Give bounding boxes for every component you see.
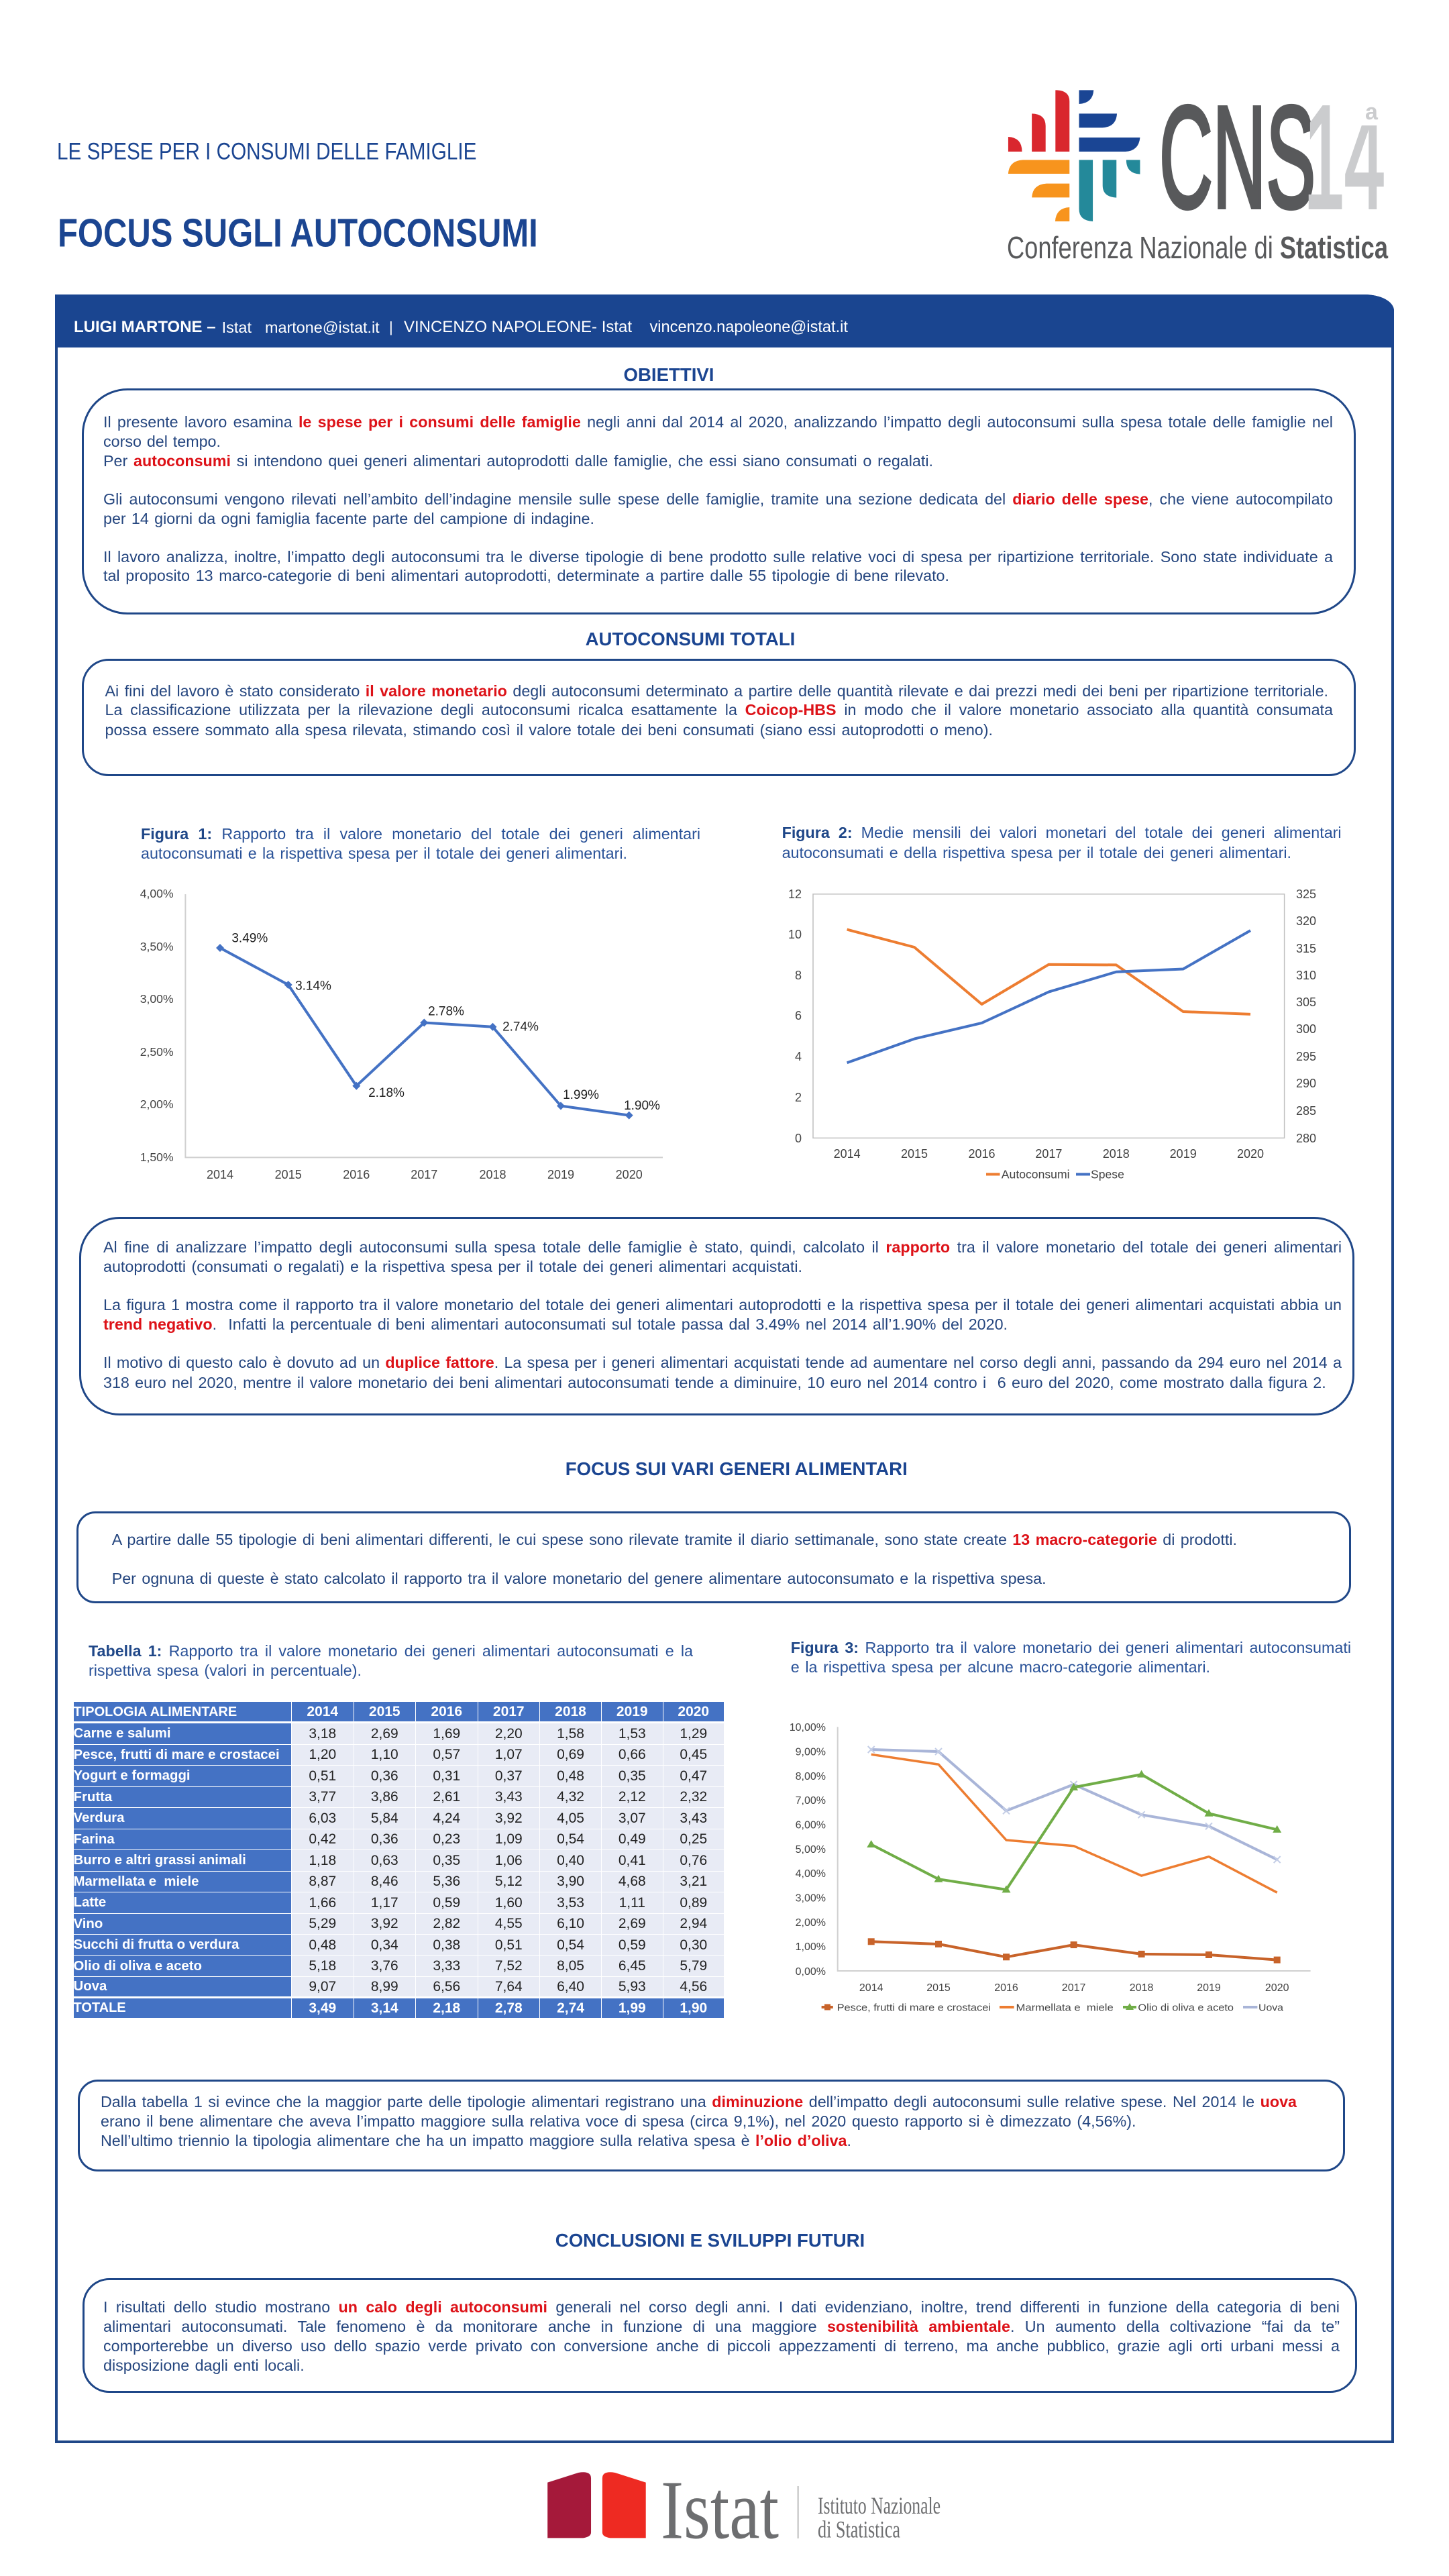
panel: rapporto e trend: trend negativo. Infatti la percentuale di beni alimentari autoconsumati sul totale passa dal 3.49% nel 2014 all’1.90% del 2020. [103,1316,1008,1333]
panel: rapporto e trend: autoprodotti (consumati o regalati) e la rispettiva spesa per il totale dei generi alimentari acquistati. [103,1257,802,1275]
table: tabella 1: 5,79 [680,1958,707,1974]
panel: rapporto e trend: Al fine di analizzare l’impatto degli autoconsumi sulla spesa totale delle famiglie è stato, quindi, calcolato il rapporto tra il valore monetario del totale dei generi alimentari [103,1238,1342,1256]
table: tabella 1: 0,31 [433,1768,460,1784]
caption: tabella 1: rispettiva spesa (valori in percentuale). [89,1662,362,1679]
main frame [55,294,1394,2443]
caption: figura 1 [141,825,700,862]
table: tabella 1: 5,12 [495,1874,523,1889]
table: tabella 1: 0,63 [371,1853,398,1868]
panel: macro-categorie: Per ognuna di queste è stato calcolato il rapporto tra il valore monetario del genere alimentare autoconsumato e la rispettiva spesa. [112,1570,1046,1587]
panel: obiettivi: Gli autoconsumi vengono rilevati nell’ambito dell’indagine mensile sulle spese delle famiglie, tramite una sezione dedicata del diario delle spese, che viene autocompilato [103,490,1333,508]
panel: obiettivi [82,388,1356,614]
table: tabella 1: 0,51 [309,1768,336,1784]
logo: CNS 14a Conferenza Nazionale di Statistica: CNS [1159,76,1316,239]
legend: figura 3: Uova [1258,2002,1284,2014]
chart: figura 1 line chart: 2018 [479,1168,506,1181]
table: tabella 1: 6,03 [309,1811,336,1826]
table: tabella 1: 0,57 [433,1747,460,1762]
panel: commento tabella: erano il bene alimentare che aveva l’impatto maggiore sulla relativa voce di spesa (circa 9,1%), nel 2020 questo rapporto si è dimezzato (4,56%). [101,2112,1136,2130]
table: tabella 1: Yogurt e formaggi [74,1768,191,1783]
logo: CNS 14a Conferenza Nazionale di Statistica: a [1365,99,1379,125]
table: tabella 1: 0,42 [309,1831,336,1847]
caption: figura 3 [791,1639,1351,1676]
table: tabella 1: 0,51 [495,1937,523,1953]
chart: figura 1 line chart: 3,00% [140,992,174,1006]
table: tabella 1: 0,48 [309,1937,336,1953]
table: tabella 1: 0,54 [557,1831,584,1847]
chart: figura 2 dual-axis line chart: 8 [795,969,802,982]
chart: figura 3 line chart: 2020 [1265,1982,1289,1994]
table: tabella 1: 0,66 [619,1747,646,1762]
table: tabella 1: 2,32 [680,1789,707,1805]
table: tabella 1: 0,38 [433,1937,460,1953]
authors bar: VINCENZO NAPOLEONE- Istat [404,318,632,336]
chart: figura 2 dual-axis line chart: 10 [788,928,802,941]
chart: figura 1 line chart: 2,50% [140,1045,174,1059]
panel: rapporto e trend: 318 euro nel 2020, mentre il valore monetario dei beni alimentari autoconsumati tende a diminuire, 10 euro nel 2014 contro i 6 euro del 2020, come mostrato dalla figura 2. [103,1374,1326,1391]
table: tabella 1: 2016 [431,1704,462,1719]
table: tabella 1: 1,99 [619,2000,646,2016]
chart: figura 1 line chart: 2,00% [140,1097,174,1111]
legend: figura 2: Spese [1091,1167,1124,1181]
authors bar: LUIGI MARTONE – [74,318,216,336]
chart: figura 2 dual-axis line chart: 2016 [968,1147,996,1161]
table: tabella 1: 1,18 [309,1853,336,1868]
chart: figura 2 dual-axis line chart: 285 [1296,1104,1316,1118]
chart: figura 2 dual-axis line chart: 4 [795,1050,802,1063]
table: tabella 1: 5,29 [309,1916,336,1931]
chart: figura 2 dual-axis line chart: 2017 [1035,1147,1062,1161]
table: tabella 1: 8,87 [309,1874,336,1889]
table: tabella 1: 0,45 [680,1747,707,1762]
chart: figura 1 line chart: 2020 [616,1168,643,1181]
table: tabella 1: 3,92 [495,1811,523,1826]
chart: figura 2 dual-axis line chart [788,888,1316,1181]
chart: figura 1 line chart: 1,50% [140,1150,174,1164]
table: tabella 1: 0,76 [680,1853,707,1868]
table: tabella 1: Latte [74,1895,106,1910]
table: tabella 1: 2,18 [433,2000,460,2016]
chart: figura 1 line chart: 2017 [411,1168,437,1181]
table: tabella 1: 3,53 [557,1895,584,1911]
table: tabella 1: 0,25 [680,1831,707,1847]
table: tabella 1: 4,68 [619,1874,646,1889]
table: tabella 1: 0,36 [371,1831,398,1847]
caption: figura 2: autoconsumati e della rispettiva spesa per il totale dei generi alimentari. [782,844,1291,861]
table: tabella 1: 2014 [307,1704,338,1719]
caption: figura 3: e la rispettiva spesa per alcune macro-categorie alimentari. [791,1658,1210,1676]
panel: commento tabella: Nell’ultimo triennio la tipologia alimentare che ha un impatto maggiore sulla relativa spesa è l’olio d’oliva. [101,2132,851,2149]
table: tabella 1: 1,66 [309,1895,336,1911]
chart: figura 2 dual-axis line chart: 0 [795,1132,802,1145]
table: tabella 1: 2,69 [619,1916,646,1931]
chart: figura 1 line chart: 3,50% [140,940,174,953]
table: tabella 1: 1,69 [433,1726,460,1741]
table: tabella 1: 0,36 [371,1768,398,1784]
legend: figura 3 [822,2002,1284,2014]
table: tabella 1: 4,32 [557,1789,584,1805]
chart: figura 2 dual-axis line chart: 280 [1296,1132,1316,1145]
table: tabella 1: 4,05 [557,1811,584,1826]
chart: figura 2 dual-axis line chart: 2019 [1170,1147,1197,1161]
table: tabella 1: 1,20 [309,1747,336,1762]
chart: figura 1 line chart: 2019 [547,1168,574,1181]
panel: obiettivi: tal proposito 13 marco-categorie di beni alimentari autoprodotti, determinate a partire dalle 55 tipologie di bene rilevato. [103,567,949,584]
legend: figura 2: Autoconsumi [1002,1167,1070,1181]
logo: Istat: di Statistica [818,2516,900,2543]
legend: figura 3: Olio di oliva e aceto [1138,2002,1234,2014]
table: tabella 1: 3,18 [309,1726,336,1741]
logo: Istat [547,2464,941,2557]
table: tabella 1: 2,69 [371,1726,398,1741]
logo: CNS 14a Conferenza Nazionale di Statistica: 14 [1304,76,1385,239]
chart: figura 2 dual-axis line chart: 290 [1296,1077,1316,1090]
table: tabella 1: Pesce, frutti di mare e crostacei [74,1748,280,1762]
panel: obiettivi: Il presente lavoro esamina le spese per i consumi delle famiglie negli anni dal 2014 al 2020, analizzando l’impatto degli autoconsumi sulla spesa totale delle famiglie nel [103,413,1333,431]
chart: figura 1 line chart: 4,00% [140,887,174,900]
legend: figura 3: Marmellata e miele [1016,2002,1114,2014]
logo: Istat: Istituto Nazionale [818,2492,941,2519]
panel: rapporto e trend: Il motivo di questo calo è dovuto ad un duplice fattore. La spesa per i generi alimentari acquistati tende ad aumentare nel corso degli anni, passando da 294 euro nel 2014 a [103,1354,1342,1371]
legend: figura 3: Pesce, frutti di mare e crostacei [837,2002,991,2014]
table: tabella 1: 3,43 [495,1789,523,1805]
table: tabella 1: 2,12 [619,1789,646,1805]
table: tabella 1: 1,11 [619,1895,645,1911]
table: tabella 1: 8,46 [371,1874,398,1889]
chart: figura 3 line chart: 8,00% [796,1771,826,1782]
table: tabella 1: Marmellata e miele [74,1874,199,1889]
caption: figura 2: Figura 2: Medie mensili dei valori monetari del totale dei generi alimentari [782,824,1342,841]
table: tabella 1: 1,07 [495,1747,523,1762]
chart: figura 1 line chart: 1.99% [563,1088,599,1102]
chart: figura 3 line chart: 2014 [859,1982,883,1994]
table: tabella 1: 1,53 [619,1726,646,1741]
chart: figura 2 dual-axis line chart: 295 [1296,1050,1316,1063]
chart: figura 2 dual-axis line chart: 2015 [901,1147,928,1161]
panel: autoconsumi totali: possa essere sommato alla spesa rilevata, stimando così il valore totale dei beni consumati (siano essi autoprodotti o meno). [105,720,993,738]
table: tabella 1: 2017 [493,1704,525,1719]
table: tabella 1: 4,24 [433,1811,460,1826]
chart: figura 3 line chart: 10,00% [790,1722,826,1733]
table: tabella 1: 3,49 [309,2000,336,2016]
panel: obiettivi: corso del tempo. [103,433,221,450]
chart: figura 3 line chart: 0,00% [796,1966,826,1978]
table: tabella 1: Farina [74,1832,115,1847]
table: tabella 1: 2,74 [557,2000,584,2016]
chart: figura 1 line chart: 2.74% [502,1020,539,1034]
chart: figura 3 line chart: 2018 [1130,1982,1153,1994]
subtitle and title: LE SPESE PER I CONSUMI DELLE FAMIGLIE [57,138,476,164]
table: tabella 1: TIPOLOGIA ALIMENTARE [74,1704,237,1719]
table: tabella 1: Verdura [74,1811,124,1825]
chart: figura 2 dual-axis line chart: 2018 [1103,1147,1130,1161]
table: tabella 1: 0,30 [680,1937,707,1953]
table: tabella 1: Frutta [74,1790,112,1805]
table: tabella 1: 3,76 [371,1958,398,1974]
authors bar [55,294,1394,347]
chart: figura 3 line chart: 1,00% [796,1941,826,1953]
panel: conclusioni [83,2278,1357,2393]
chart: figura 3 line chart: 2016 [994,1982,1018,1994]
table: tabella 1: 2,78 [495,2000,523,2016]
table: tabella 1: 7,52 [495,1958,523,1974]
chart: figura 2 dual-axis line chart: 2014 [834,1147,861,1161]
authors bar: | [389,319,393,335]
chart: figura 3 line chart: 2019 [1197,1982,1221,1994]
table: tabella 1: 1,06 [495,1853,523,1868]
table: tabella 1: 0,34 [371,1937,398,1953]
table: tabella 1: 5,36 [433,1874,460,1889]
chart: figura 3 line chart: 5,00% [796,1844,826,1856]
chart: figura 1 line chart: 2.78% [428,1005,464,1018]
logo: CNS 14a Conferenza Nazionale di Statistica: Conferenza Nazionale di Statistica [1007,230,1388,265]
table: tabella 1: 6,10 [557,1916,584,1931]
table: tabella 1: 0,54 [557,1937,584,1953]
caption: figura 1: Figura 1: Rapporto tra il valore monetario del totale dei generi alimentari [141,825,700,843]
table: tabella 1: 9,07 [309,1979,336,1994]
table: tabella 1: 2,82 [433,1916,460,1931]
table: tabella 1: 5,18 [309,1958,336,1974]
panel: obiettivi: Per autoconsumi si intendono quei generi alimentari autoprodotti dalle famiglie, che essi siano consumati o regalati. [103,452,933,470]
table: tabella 1: 2,20 [495,1726,523,1741]
panel: autoconsumi totali: Ai fini del lavoro è stato considerato il valore monetario degli autoconsumi determinato a partire delle quantità rilevate e dai prezzi medi dei beni per ripartizione territoriale. [105,682,1328,699]
chart: figura 3 line chart: 2017 [1062,1982,1085,1994]
caption: tabella 1: Tabella 1: Rapporto tra il valore monetario dei generi alimentari autoconsumati e la [89,1642,693,1660]
table: tabella 1: 0,41 [619,1853,646,1868]
table: tabella 1: Carne e salumi [74,1726,171,1741]
table: tabella 1: 0,35 [433,1853,460,1868]
chart: figura 2 dual-axis line chart: 310 [1296,969,1316,982]
table: tabella 1: 3,07 [619,1811,646,1826]
heading: autoconsumi totali: AUTOCONSUMI TOTALI [586,629,795,649]
heading: focus sui vari generi alimentari: FOCUS SUI VARI GENERI ALIMENTARI [566,1458,908,1479]
chart: figura 3 line chart: 2015 [926,1982,951,1994]
table: tabella 1: 1,10 [371,1747,398,1762]
chart: figura 1 line chart: 2016 [343,1168,370,1181]
table: tabella 1: 0,23 [433,1831,460,1847]
table: tabella 1: 2020 [678,1704,709,1719]
table: tabella 1: 8,05 [557,1958,584,1974]
table: tabella 1: 5,84 [371,1811,398,1826]
table: tabella 1: 5,93 [619,1979,646,1994]
panel: commento tabella [78,2080,1345,2171]
chart: figura 2 dual-axis line chart: 12 [788,888,802,901]
panel: conclusioni: I risultati dello studio mostrano un calo degli autoconsumi generali nel corso degli anni. I dati evidenziano, inoltre, trend differenti in funzione della categoria di beni [103,2298,1340,2316]
table: tabella 1: 0,59 [433,1895,460,1911]
authors bar: Istat [222,319,252,336]
chart: figura 1 line chart: 3.49% [231,931,268,946]
table: tabella 1: 0,48 [557,1768,584,1784]
panel: obiettivi: per 14 giorni da ogni famiglia facente parte del campione di indagine. [103,510,594,527]
caption: figura 2 [782,824,1342,861]
chart: figura 3 line chart: 7,00% [796,1795,826,1807]
authors bar: vincenzo.napoleone@istat.it [649,319,848,336]
chart: figura 2 dual-axis line chart: 320 [1296,914,1316,928]
chart: figura 1 line chart [140,887,663,1181]
table: tabella 1 [74,1702,724,2018]
table: tabella 1: 0,47 [680,1768,707,1784]
logo: Istat: Istat [661,2464,779,2557]
panel: macro-categorie [76,1511,1351,1603]
authors bar: martone@istat.it [265,319,380,336]
table: tabella 1: 2018 [555,1704,586,1719]
table: tabella 1: Vino [74,1917,103,1931]
heading: conclusioni e sviluppi futuri: CONCLUSIONI E SVILUPPI FUTURI [555,2230,865,2251]
chart: figura 3 line chart [790,1722,1311,2014]
table: tabella 1: 0,35 [619,1768,646,1784]
legend: figura 2 [986,1167,1124,1181]
caption: tabella 1 [89,1642,693,1679]
table: tabella 1: 0,37 [495,1768,523,1784]
chart: figura 1 line chart: 3.14% [295,979,331,993]
table: tabella 1: Olio di oliva e aceto [74,1959,202,1974]
table: tabella 1: Uova [74,1979,107,1994]
chart: figura 2 dual-axis line chart: 6 [795,1009,802,1022]
panel: obiettivi: Il lavoro analizza, inoltre, l’impatto degli autoconsumi tra le diverse tipologie di bene prodotto sulle relative voci di spesa per ripartizione territoriale. Sono state individuate a [103,548,1333,566]
table: tabella 1: 6,40 [557,1979,584,1994]
table: tabella 1: 3,90 [557,1874,584,1889]
panel: autoconsumi totali: La classificazione utilizzata per la rilevazione degli autoconsumi ricalca esattamente la Coicop-HBS in modo che il valore monetario associato alla quantità consumata [105,701,1333,718]
chart: figura 1 line chart: 2.18% [368,1086,405,1100]
table: tabella 1: 1,09 [495,1831,523,1847]
table: tabella 1: 2019 [616,1704,648,1719]
table: tabella 1: 0,49 [619,1831,646,1847]
table: tabella 1: 3,92 [371,1916,398,1931]
panel: rapporto e trend [79,1217,1354,1415]
table: tabella 1: 2,61 [433,1789,460,1805]
chart: figura 3 line chart: 4,00% [796,1868,826,1880]
panel: conclusioni: disposizione dagli enti locali. [103,2357,305,2374]
table: tabella 1: 0,89 [680,1895,707,1911]
chart: figura 2 dual-axis line chart: 2 [795,1091,802,1104]
table: tabella 1: 1,58 [557,1726,584,1741]
subtitle and title: FOCUS SUGLI AUTOCONSUMI [58,211,538,256]
table: tabella 1: 2015 [369,1704,400,1719]
chart: figura 1 line chart: 2015 [275,1168,302,1181]
panel: conclusioni: alimentari autoconsumati. Tale fenomeno è da monitorare anche in funzione di una maggiore sostenibilità ambientale. Un aumento della coltivazione “fai da te” [103,2318,1340,2335]
panel: autoconsumi totali [82,659,1356,776]
table: tabella 1: 3,33 [433,1958,460,1974]
chart: figura 1 line chart: 2014 [207,1168,233,1181]
table: tabella 1: 3,86 [371,1789,398,1805]
table: tabella 1: 4,56 [680,1979,707,1994]
panel: commento tabella: Dalla tabella 1 si evince che la maggior parte delle tipologie alimentari registrano una diminuzione dell’impatto degli autoconsumi sulle relative spese. Nel 2014 le uova [101,2093,1297,2110]
table: tabella 1: 3,43 [680,1811,707,1826]
panel: conclusioni: comporterebbe un diverso uso dello spazio verde privato con conversione anche di piccoli appezzamenti di terreno, ma anche pubblico, grazie agli orti urbani messi a [103,2337,1340,2355]
table: tabella 1: 4,55 [495,1916,523,1931]
panel: rapporto e trend: La figura 1 mostra come il rapporto tra il valore monetario del totale dei generi alimentari autoprodotti e la rispettiva spesa per il totale dei generi alimentari acquistati abbia un [103,1296,1342,1313]
logo: CNS 14a Conferenza Nazionale di Statistica [1007,76,1389,265]
table: tabella 1: 3,21 [680,1874,707,1889]
chart: figura 3 line chart: 6,00% [796,1819,826,1831]
chart: figura 3 line chart: 2,00% [796,1917,826,1929]
chart: figura 1 line chart: 1.90% [624,1099,660,1113]
subtitle and title [57,138,538,256]
table: tabella 1: 1,60 [495,1895,523,1911]
table: tabella 1: 6,56 [433,1979,460,1994]
table: tabella 1: 3,14 [371,2000,398,2016]
table: tabella 1: 3,77 [309,1789,336,1805]
chart: figura 3 line chart: 3,00% [796,1893,826,1904]
table: tabella 1: Burro e altri grassi animali [74,1853,246,1868]
table: tabella 1: Succhi di frutta o verdura [74,1937,239,1952]
chart: figura 2 dual-axis line chart: 325 [1296,888,1316,901]
chart: figura 2 dual-axis line chart: 315 [1296,942,1316,955]
chart: figura 3 line chart: 9,00% [796,1747,826,1758]
table: tabella 1: 1,17 [371,1895,398,1911]
table: tabella 1: 0,69 [557,1747,584,1762]
table: tabella 1: 8,99 [371,1979,398,1994]
table: tabella 1: TOTALE [74,2000,126,2015]
table: tabella 1: 6,45 [619,1958,646,1974]
chart: figura 2 dual-axis line chart: 305 [1296,996,1316,1009]
chart: figura 2 dual-axis line chart: 2020 [1237,1147,1264,1161]
table: tabella 1: 0,40 [557,1853,584,1868]
table: tabella 1: 1,29 [680,1726,707,1741]
heading: obiettivi: OBIETTIVI [624,364,714,385]
table: tabella 1: 0,59 [619,1937,646,1953]
chart: figura 2 dual-axis line chart: 300 [1296,1022,1316,1036]
caption: figura 1: autoconsumati e la rispettiva spesa per il totale dei generi alimentari. [141,845,627,862]
table: tabella 1: 2,94 [680,1916,707,1931]
table: tabella 1: 1,90 [680,2000,707,2016]
table: tabella 1: 7,64 [495,1979,523,1994]
panel: macro-categorie: A partire dalle 55 tipologie di beni alimentari differenti, le cui spese sono rilevate tramite il diario settimanale, sono state create 13 macro-categorie di prodotti. [112,1531,1237,1548]
caption: figura 3: Figura 3: Rapporto tra il valore monetario dei generi alimentari autoconsumati [791,1639,1351,1656]
